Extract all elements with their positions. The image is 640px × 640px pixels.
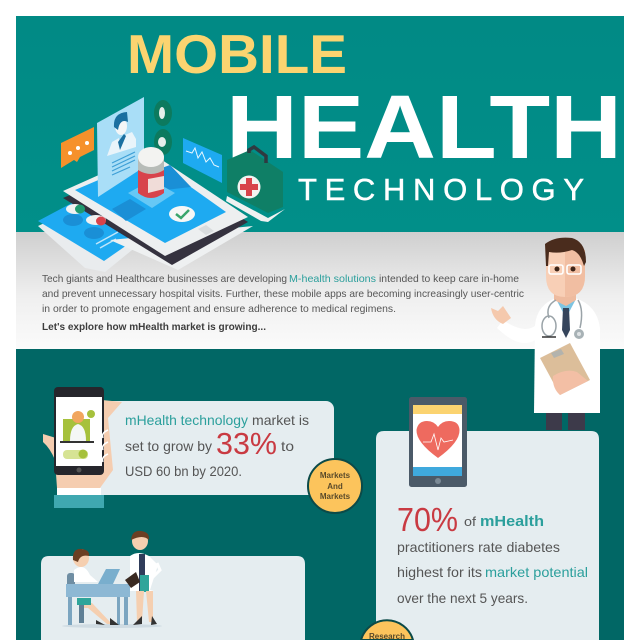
stat text: 70%: practitioners rate diabetes xyxy=(397,539,560,555)
icon: heartbeat monitor xyxy=(183,138,222,183)
intro text: intended to keep care in-home xyxy=(379,273,519,285)
title: TECHNOLOGY xyxy=(298,172,584,207)
stat text: 70%: 70% xyxy=(397,501,458,538)
title: MOBILE xyxy=(127,23,347,85)
panel: market growth card xyxy=(43,387,362,513)
source badge: Markets And Markets: Markets xyxy=(320,471,351,480)
source badge: Markets And Markets: Markets xyxy=(320,492,351,501)
stat text: 70%: over the next 5 years. xyxy=(397,590,528,606)
intro text xyxy=(42,273,524,333)
stat text: 33%: 33% xyxy=(216,426,277,461)
icon: doctor profile card xyxy=(97,97,144,197)
icon: orange chat bubble xyxy=(61,127,94,168)
intro text: and prevent unnecessary hospital visits. Further, these mobile apps are becoming increasingly user-centric xyxy=(42,288,524,300)
stat text: 70%: of xyxy=(464,514,476,529)
illustration: isometric phone with health icons xyxy=(38,97,285,272)
stat text: 33%: market is xyxy=(252,412,309,428)
icon: check badge xyxy=(169,206,195,222)
source badge: Markets And Markets xyxy=(308,459,362,513)
stat text: 33%: set to grow by xyxy=(125,438,212,454)
icon: tablet with heart xyxy=(409,397,467,487)
intro text: M-health solutions xyxy=(289,273,376,285)
lower stats panel xyxy=(16,349,624,640)
intro text: in order to promote engagement and ensure adherence to medical regimens. xyxy=(42,303,396,315)
header panel xyxy=(16,16,624,232)
icon: two capsules xyxy=(66,204,106,226)
illustration: doctor with clipboard xyxy=(491,238,600,430)
stat text: 70% xyxy=(397,501,588,606)
stat text: 70%: market potential xyxy=(485,564,588,580)
intro text: Tech giants and Healthcare businesses are developing xyxy=(42,273,287,285)
stat text: 70%: mHealth xyxy=(480,513,544,530)
title: HEALTH xyxy=(226,78,622,178)
icon: hand holding phone xyxy=(43,387,122,508)
source badge: Markets And Markets: And xyxy=(327,482,343,491)
panel: practitioners card xyxy=(361,397,599,640)
stat text: 33%: USD 60 bn by 2020. xyxy=(125,463,242,479)
icon: first aid kit xyxy=(226,147,285,222)
illustration: two doctors and desk xyxy=(62,531,162,628)
stat text: 70%: highest for its xyxy=(397,564,482,580)
stat text: 33%: mHealth technology xyxy=(125,412,248,428)
source badge: Research xyxy=(361,620,413,640)
panel: doctors at desk card xyxy=(41,531,305,640)
intro text: Let's explore how mHealth market is growing... xyxy=(42,321,266,333)
blue card under phone xyxy=(38,196,137,272)
phone body xyxy=(63,152,253,270)
stat text: 33%: to xyxy=(281,438,294,454)
icon: green medicine badges xyxy=(154,100,172,155)
intro band xyxy=(16,232,624,349)
stat text: 33% xyxy=(125,412,309,479)
title xyxy=(127,23,622,207)
icon: pill bottle xyxy=(128,147,175,208)
